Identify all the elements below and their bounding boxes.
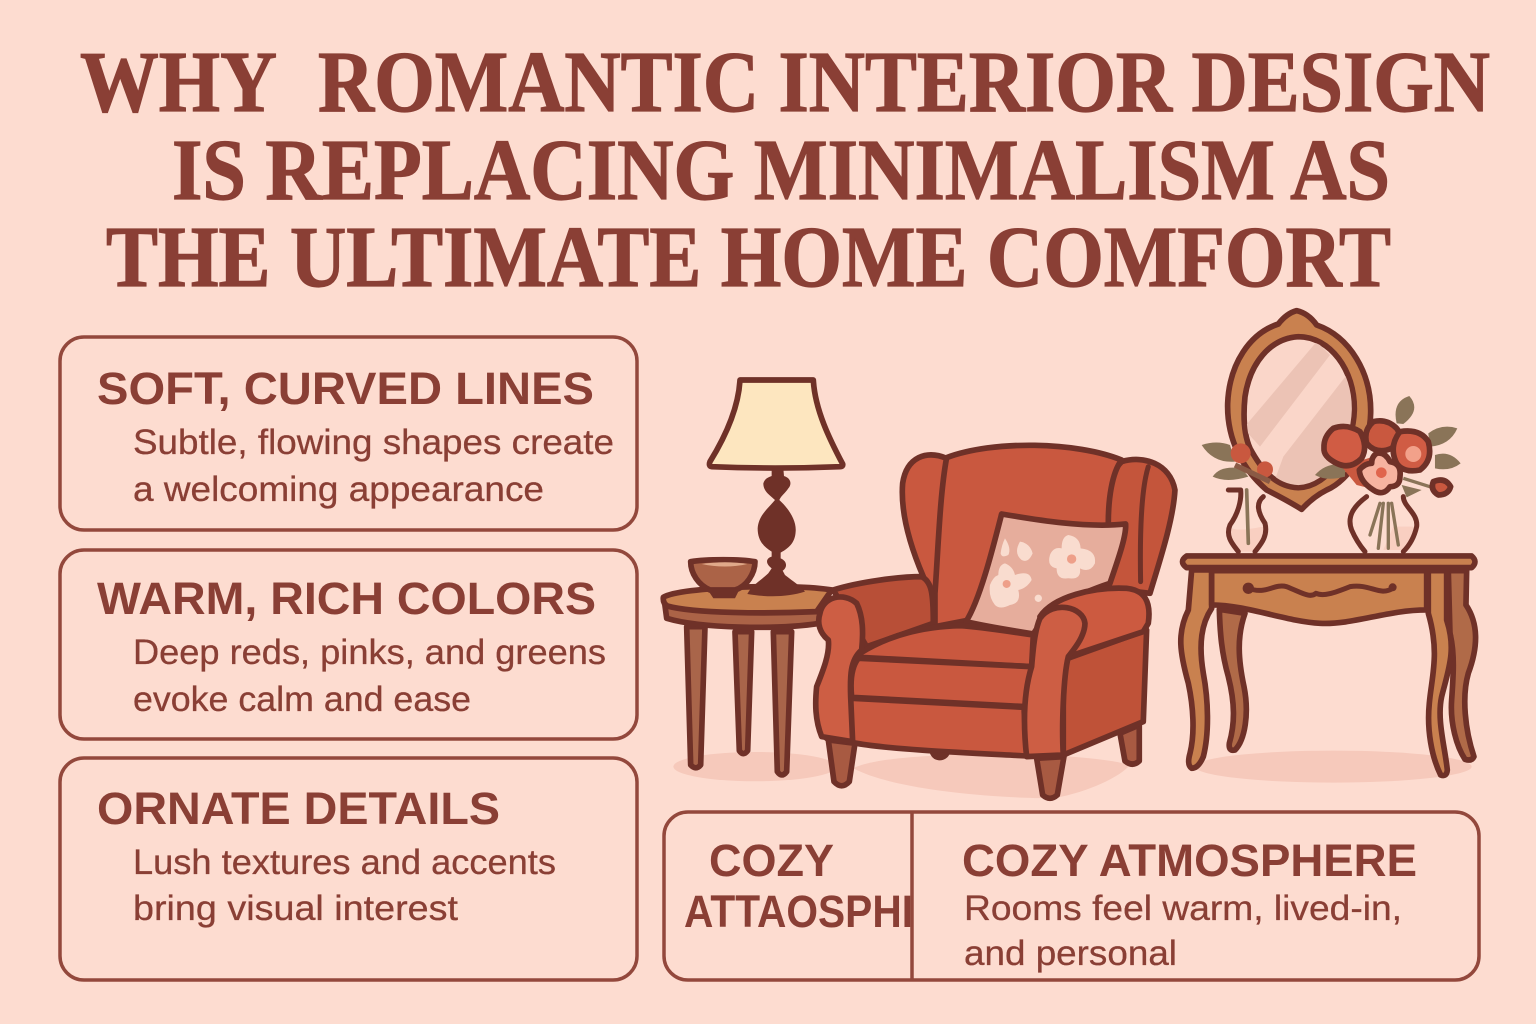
floor shadows [673,752,1130,798]
icon: bouquet [1315,396,1461,497]
icon: left flowers [1231,443,1273,482]
icon: left flowers leaves [1202,442,1276,480]
title: IS REPLACING MINIMALISM AS [172,121,1390,218]
panel: soft, curved lines: a welcoming appearance [133,470,544,509]
panel: warm, rich colors [60,550,637,739]
pillow [966,514,1126,634]
panel: soft, curved lines: Subtle, flowing shapes create [133,423,614,462]
panel: cozy atmosphere: Rooms feel warm, lived-in, [964,889,1402,928]
armchair [816,445,1175,798]
panel: warm, rich colors: Deep reds, pinks, and greens [133,633,606,672]
side table [663,587,832,775]
panel: soft, curved lines: SOFT, CURVED LINES [97,363,594,414]
illustration: side table, lamp and armchair [663,380,1175,798]
panel: ornate details: Lush textures and accents [133,843,556,882]
illustration: vanity table, mirror and flowers [1181,311,1476,783]
panel: soft, curved lines [60,337,637,530]
panel: ornate details: ORNATE DETAILS [97,783,500,834]
vanity table [1181,556,1476,776]
icon: left vase [1228,490,1266,552]
panel: cozy atmosphere: COZY ATMOSPHERE [962,835,1417,886]
panel: ornate details: bring visual interest [133,889,458,928]
title: WHY [80,33,277,130]
title [80,33,1490,305]
panel: warm, rich colors: evoke calm and ease [133,680,471,719]
icon: right vase [1350,497,1417,552]
panel: cozy atmosphere: COZY [709,835,834,886]
panel: ornate details [60,758,637,980]
mirror [1228,311,1371,509]
icon: lamp [709,380,843,596]
floor shadow [1195,751,1472,783]
icon: bowl [691,560,755,598]
panel: warm, rich colors: WARM, RICH COLORS [97,573,596,624]
panel: cozy atmosphere: and personal [964,934,1177,973]
panel: cozy atmosphere [664,812,1479,980]
title: THE ULTIMATE HOME COMFORT [106,208,1391,305]
